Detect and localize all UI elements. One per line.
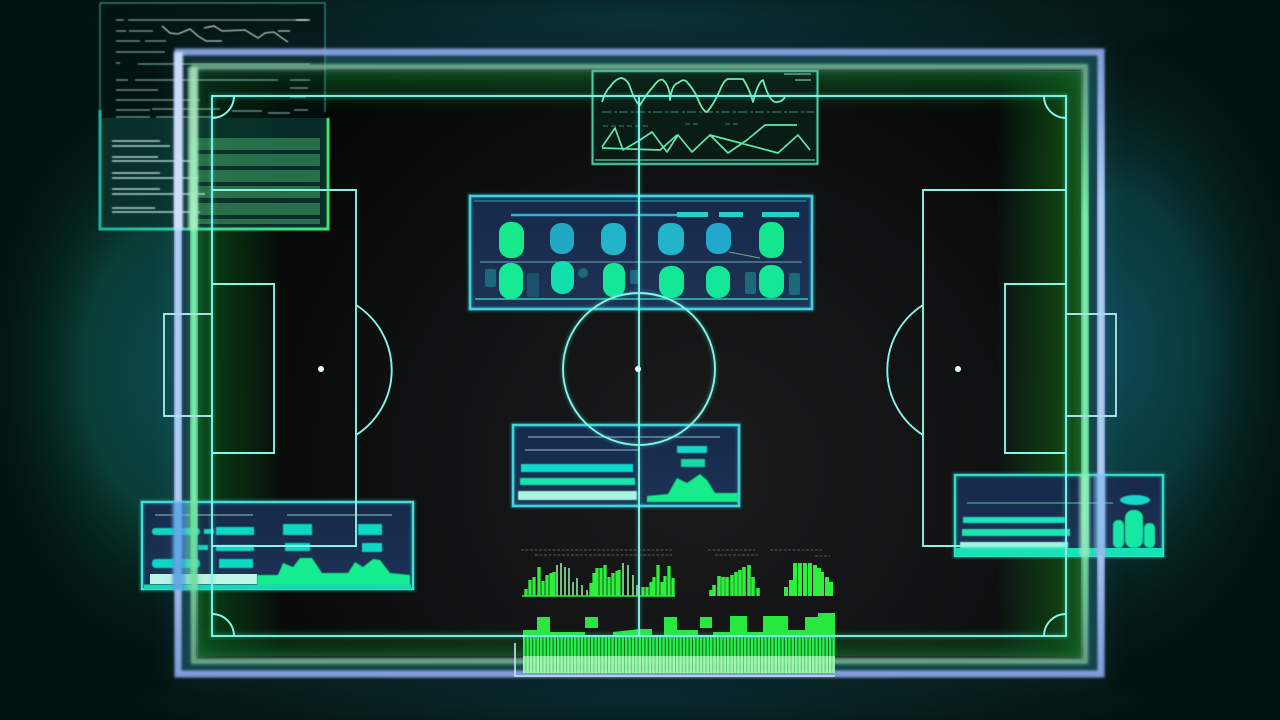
centre circle <box>563 293 715 445</box>
right goal <box>1066 314 1116 416</box>
hat and bar icon <box>1113 495 1155 548</box>
lower table panel <box>100 118 326 229</box>
pitch boundary <box>212 96 1066 636</box>
bar chart A <box>522 563 675 596</box>
panel: top-left data sheet <box>100 2 328 229</box>
bracket <box>515 643 835 676</box>
panel: centre stats <box>513 425 739 506</box>
panel: right stats <box>955 475 1163 556</box>
bar chart C <box>786 563 831 596</box>
stepped bar band <box>523 613 835 637</box>
bar chart B <box>711 565 758 596</box>
left penalty area <box>212 190 356 546</box>
area chart <box>257 558 410 585</box>
top row pills <box>499 222 784 258</box>
panel: player score cards <box>470 196 812 309</box>
pale comb bars <box>523 656 835 673</box>
stat bars <box>152 524 382 568</box>
halfway line <box>638 96 640 636</box>
corner arcs <box>212 96 1066 636</box>
stat bars <box>960 517 1070 548</box>
upper table text lines <box>116 20 310 117</box>
pitch spots <box>318 366 961 372</box>
right goal area <box>1005 284 1066 453</box>
bottom row pills <box>499 261 784 299</box>
stat bars <box>518 446 707 500</box>
lower table text lines <box>112 141 205 212</box>
frame interior <box>178 52 1101 674</box>
right penalty area <box>923 190 1066 546</box>
right penalty arc <box>887 305 923 435</box>
header bars <box>511 212 799 217</box>
area chart <box>647 474 738 502</box>
lower line chart <box>602 125 810 153</box>
small background tiles <box>485 268 800 297</box>
left penalty arc <box>356 305 392 435</box>
frame: glowing double border <box>174 50 1104 676</box>
left goal <box>164 314 212 416</box>
chart labels <box>521 550 830 556</box>
upper wave chart <box>602 78 785 112</box>
lower table rows <box>196 138 320 224</box>
bottom bar charts <box>515 550 835 676</box>
panel: top centre line charts <box>592 71 818 164</box>
sparkline <box>162 20 310 42</box>
left goal area <box>212 284 274 453</box>
panel: left stats <box>142 502 413 589</box>
comb bars <box>523 637 835 656</box>
pitch lines <box>164 96 1116 636</box>
frame overlap highlights on panels <box>172 52 1106 590</box>
